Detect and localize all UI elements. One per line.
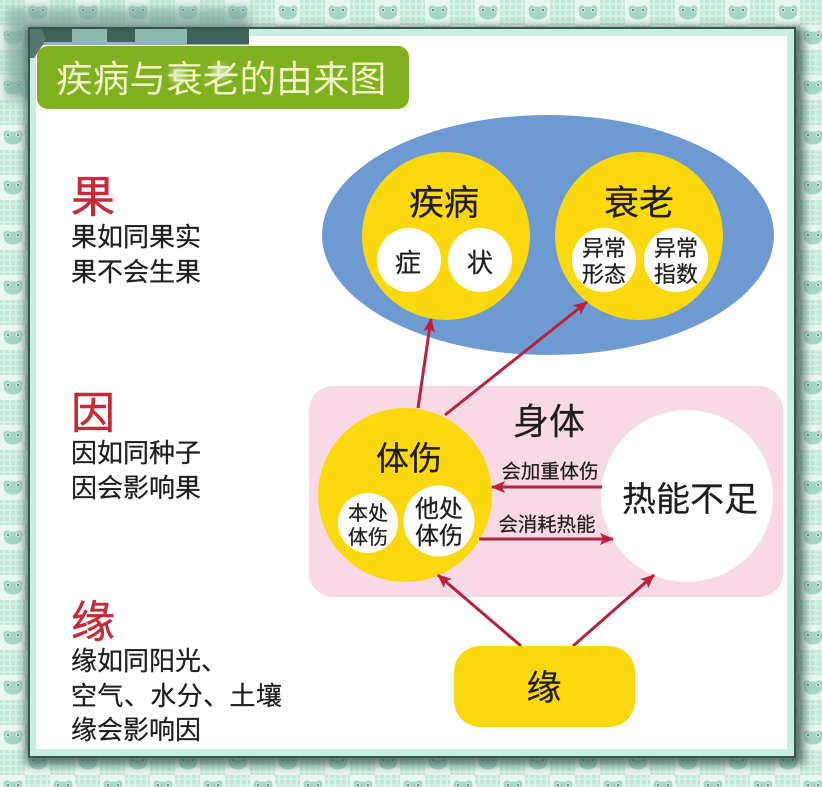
circle: 衰老: 异常	[654, 236, 698, 261]
circle: 衰老	[555, 152, 723, 320]
arrow: 会加重体伤: 会加重体伤	[502, 461, 598, 483]
blue ellipse: results	[322, 115, 774, 355]
arrow: 会消耗热能	[479, 514, 613, 539]
left column: 缘: 空气、水分、土壤	[71, 681, 282, 711]
circle: 疾病: 疾病	[409, 184, 479, 223]
arrow: 缘 to 体伤	[438, 575, 521, 646]
circle: 体伤: 体伤	[348, 526, 388, 549]
left column: 因	[71, 389, 201, 503]
left column: 因: 因如同种子	[71, 438, 201, 468]
circle: 热能不足	[601, 410, 773, 582]
left column: 缘: 缘如同阳光、	[71, 646, 227, 676]
left column: 果: 果不会生果	[71, 257, 201, 287]
circle: 衰老: 衰老	[604, 184, 674, 223]
arrow: 体伤 to 衰老	[445, 302, 587, 415]
left column: 果	[71, 173, 201, 287]
circle: 体伤: 体伤	[376, 440, 442, 477]
circle: 体伤: 本处	[348, 502, 388, 525]
title banner	[37, 46, 409, 109]
circle: 疾病: 症	[395, 248, 421, 278]
arrow: 会消耗热能: 会消耗热能	[499, 514, 595, 536]
left column: 缘: 缘会影响因	[71, 715, 201, 745]
box: 缘	[454, 646, 635, 727]
circle: 体伤: 他处	[415, 496, 463, 523]
circle: 衰老: 形态	[582, 262, 626, 287]
circle: 疾病: 状	[467, 248, 493, 278]
circle: 衰老: 异常	[582, 236, 626, 261]
left column: 果: 果	[71, 173, 115, 222]
arrow: 体伤 to 疾病	[418, 319, 431, 408]
title banner: 疾病与衰老的由来图	[56, 59, 386, 100]
circle: 体伤: 体伤	[415, 523, 463, 550]
circle: 疾病	[362, 152, 530, 320]
pink panel: body: 身体	[513, 401, 585, 442]
left column: 缘	[71, 598, 282, 745]
circle: 热能不足: 热能不足	[622, 481, 758, 519]
left column: 因: 因	[71, 389, 115, 438]
corner smudge	[6, 8, 250, 100]
pink panel: body	[309, 386, 783, 597]
left column: 因: 因会影响果	[71, 473, 201, 503]
left column: 缘: 缘	[71, 598, 115, 647]
arrow: 缘 to 热能不足	[573, 575, 654, 646]
circle: 衰老: 指数	[654, 262, 698, 287]
box: 缘: 缘	[526, 669, 562, 708]
left column: 果: 果如同果实	[71, 222, 201, 252]
circle: 体伤	[318, 408, 492, 582]
